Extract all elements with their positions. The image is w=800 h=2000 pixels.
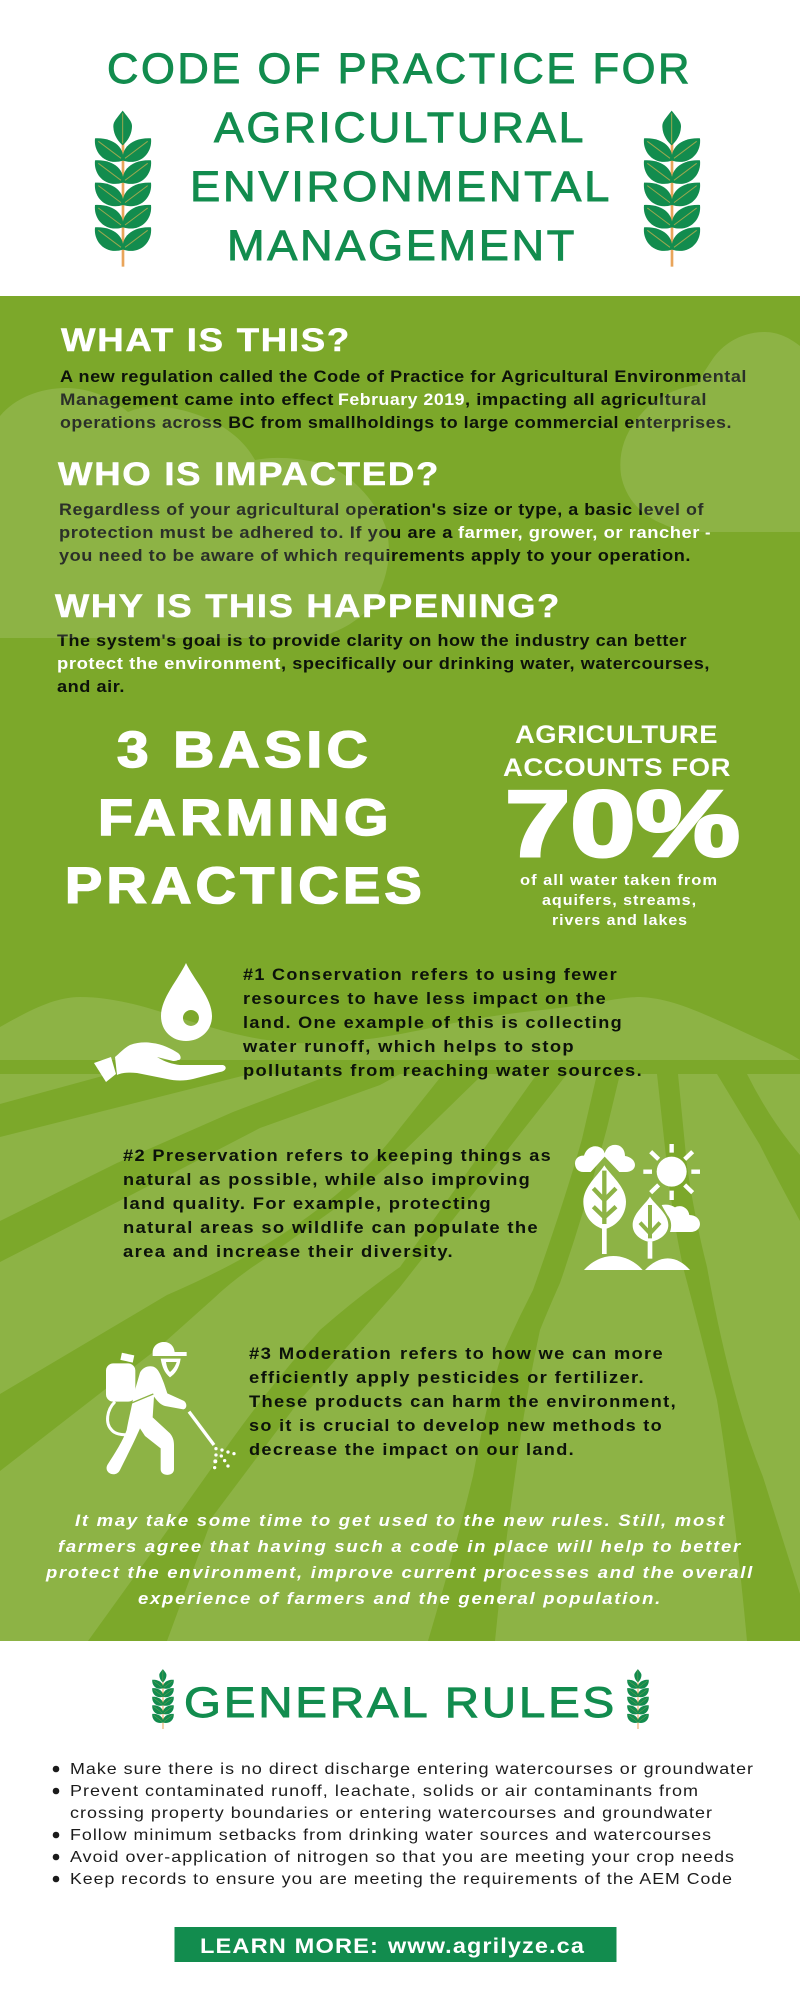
closing italic statement: It may take some time to get used to the new rules. Still, most [75,1511,726,1530]
text block: #1 conservation [242,966,643,1080]
text block: what is this [60,368,747,432]
text block: who is impacted: you need to be aware of which requirements apply to your operation. [59,547,691,565]
text block: #1 conservation: land. One example of this is collecting [243,1014,623,1032]
list: general rules: crossing property boundaries or entering watercourses and groundwater [70,1805,713,1822]
text block: #3 moderation [249,1345,677,1459]
icon: small wheat right [627,1669,649,1729]
list: general rules: Make sure there is no direct discharge entering watercourses or groundwater [70,1761,754,1778]
text block: #3 moderation: refers to how we can more [400,1345,664,1363]
heading: 3 basic farming practices: 3 BASIC [117,721,372,778]
heading: general rules: GENERAL RULES [184,1679,617,1727]
text block: #2 preservation: land quality. For example, protecting [123,1195,492,1213]
closing italic statement: protect the environment, improve current processes and the overall [45,1563,754,1582]
title: MANAGEMENT [227,222,577,270]
panel: green background [0,296,800,1641]
text block: #2 preservation: refers to keeping things as [286,1147,552,1165]
text block: #1 conservation: resources to have less impact on the [243,990,607,1008]
text block: #3 moderation: #3 Moderation [249,1345,392,1363]
heading: 3 basic farming practices: PRACTICES [65,857,426,914]
callout: 70 percent statistic: of all water taken from [520,872,718,889]
text block: why is this happening: The system's goal is to provide clarity on how the industry can better [57,632,687,650]
title: ENVIRONMENTAL [190,163,612,211]
icon: wheat right [644,111,700,267]
callout: 70 percent statistic: aquifers, streams, [542,892,697,909]
text block: what is this: operations across BC from smallholdings to large commercial enterprises. [60,414,732,432]
text block: why is this happening: and air. [57,678,125,696]
text block: #2 preservation: #2 Preservation [123,1147,279,1165]
callout: 70 percent statistic: ACCOUNTS FOR [503,754,731,782]
decorative cloud left [0,388,389,638]
heading: 3 basic farming practices [65,721,426,914]
callout: 70 percent statistic: AGRICULTURE [515,721,718,749]
button: learn more: LEARN MORE: [200,1935,379,1958]
text block: who is impacted: - [705,524,711,542]
text block: who is impacted: Regardless of your agricultural operation's size or type, a basic level of [59,501,704,519]
button: learn more: www.agrilyze.ca [387,1935,585,1958]
text block: #1 conservation: water runoff, which helps to stop [242,1038,575,1056]
icon: hand with water drop [94,963,226,1082]
text block: who is impacted [59,501,711,565]
closing italic statement: farmers agree that having such a code in place will help to better [58,1537,742,1556]
closing italic statement: experience of farmers and the general population. [138,1589,662,1608]
text block: #1 conservation: refers to using fewer [411,966,618,984]
text block: #3 moderation: efficiently apply pesticides or fertilizer. [249,1369,645,1387]
icon: farmer spraying [106,1342,236,1475]
icon: trees, clouds and sun [575,1144,700,1270]
text block: #2 preservation: area and increase their diversity. [123,1243,454,1261]
heading: who is impacted: WHO IS IMPACTED? [58,456,440,492]
field background: hills [0,997,800,1060]
text block: #3 moderation: These products can harm the environment, [249,1393,677,1411]
title: CODE OF PRACTICE FOR [107,45,692,93]
list: general rules: Follow minimum setbacks from drinking water sources and watercourses [70,1827,712,1844]
text block: #3 moderation: decrease the impact on our land. [249,1441,575,1459]
text block: what is this: Management came into effect [60,391,334,409]
callout: 70 percent statistic: 70% [505,771,740,876]
field background: rows [0,1074,800,1641]
text block: #2 preservation: natural areas so wildlife can populate the [123,1219,539,1237]
text block: why is this happening: protect the environment [57,655,281,673]
text block: who is impacted: protection must be adhered to. If you are a [59,524,453,542]
heading: what is this: WHAT IS THIS? [61,322,351,358]
heading: why is this happening: WHY IS THIS HAPPENING? [55,588,561,624]
text block: what is this: February 2019 [338,391,465,409]
list: general rules: Avoid over-application of nitrogen so that you are meeting your crop needs [70,1849,735,1866]
icon: wheat left [95,111,151,267]
text block: what is this: A new regulation called the Code of Practice for Agricultural Environmental [60,368,747,386]
icon: small wheat left [152,1669,174,1729]
text block: why is this happening: , specifically our drinking water, watercourses, [281,655,710,673]
text block: #2 preservation: natural as possible, while also improving [123,1171,531,1189]
callout: 70 percent statistic: rivers and lakes [552,912,688,929]
decorative cloud right [620,332,800,532]
button: learn more [174,1927,616,1962]
text block: #3 moderation: so it is crucial to develop new methods to [249,1417,663,1435]
list: general rules [53,1761,754,1888]
text block: what is this: , impacting all agricultural [465,391,707,409]
text block: #2 preservation [123,1147,552,1261]
text block: #1 conservation: #1 Conservation [243,966,403,984]
closing italic statement [45,1511,754,1608]
text block: why is this happening [57,632,710,696]
list: general rules: Keep records to ensure you are meeting the requirements of the AEM Code [70,1871,733,1888]
title: AGRICULTURAL [214,104,586,152]
title [107,45,692,270]
text block: #1 conservation: pollutants from reaching water sources. [243,1062,643,1080]
heading: 3 basic farming practices: FARMING [98,789,393,846]
list: general rules: Prevent contaminated runoff, leachate, solids or air contaminants from [70,1783,699,1800]
text block: who is impacted: farmer, grower, or rancher [458,524,700,542]
callout: 70 percent statistic [503,721,740,929]
